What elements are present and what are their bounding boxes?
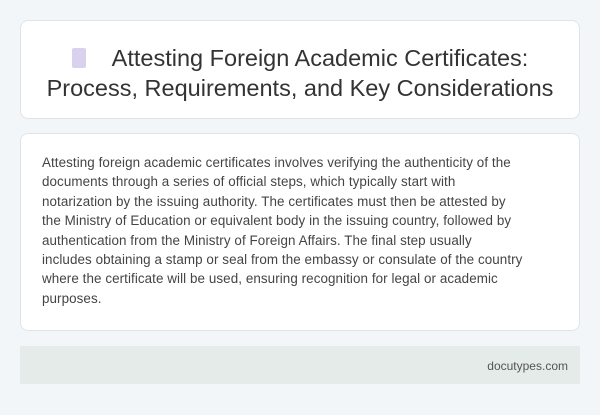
text block: Attesting foreign academic certificates involves verifying the authenticity of the <box>42 155 511 170</box>
text block <box>42 155 522 306</box>
text block: the Ministry of Education or equivalent body in the issuing country, followed by <box>42 213 511 228</box>
title <box>47 45 553 101</box>
footer: docutypes.com <box>487 359 568 373</box>
title: Attesting Foreign Academic Certificates: <box>112 45 528 71</box>
footer <box>20 346 580 384</box>
text block: documents through a series of official steps, which typically start with <box>42 174 455 189</box>
text block: includes obtaining a stamp or seal from the embassy or consulate of the country <box>42 252 522 267</box>
icon: scroll <box>72 48 86 68</box>
title: Process, Requirements, and Key Considerations <box>47 75 553 101</box>
panel: description <box>20 133 580 331</box>
text block: where the certificate will be used, ensuring recognition for legal or academic <box>42 271 498 286</box>
title panel <box>20 20 580 119</box>
text block: notarization by the issuing authority. The certificates must then be attested by <box>42 194 506 209</box>
text block: purposes. <box>42 291 102 306</box>
text block: authentication from the Ministry of Foreign Affairs. The final step usually <box>42 233 472 248</box>
